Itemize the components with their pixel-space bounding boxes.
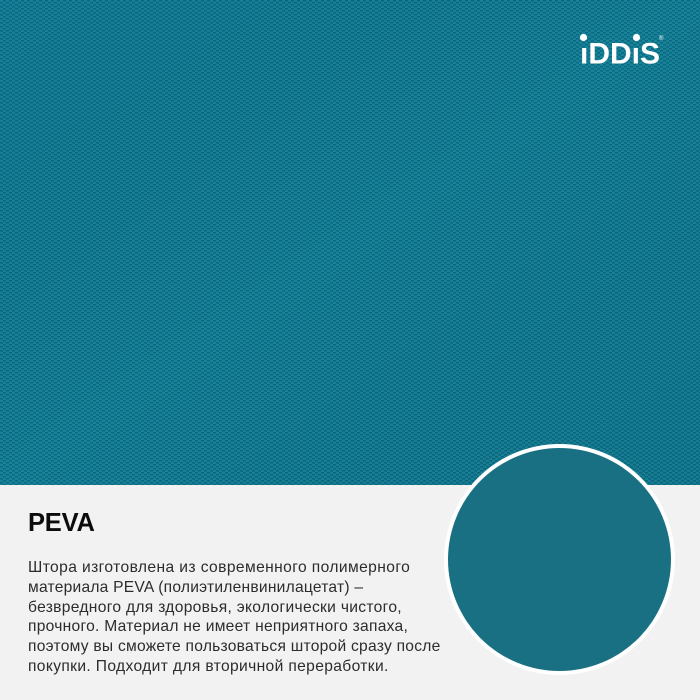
description text: поэтому вы сможете пользоваться шторой сразу после bbox=[28, 638, 441, 655]
title: PEVA bbox=[28, 509, 95, 537]
description text: безвредного для здоровья, экологически чистого, bbox=[28, 599, 402, 616]
description text: Штора изготовлена из современного полимерного bbox=[28, 559, 410, 576]
description text: прочного. Материал не имеет неприятного запаха, bbox=[28, 618, 408, 635]
description text: покупки. Подходит для вторичной переработки. bbox=[28, 658, 389, 675]
bottom text panel bbox=[0, 485, 700, 700]
circular material swatch bbox=[444, 444, 675, 675]
logo: IDDIS: ® bbox=[659, 35, 664, 42]
description text bbox=[28, 559, 441, 675]
logo: IDDIS: ıDDıS bbox=[580, 38, 660, 70]
fabric background bbox=[0, 0, 700, 485]
description text: материала PEVA (полиэтиленвинилацетат) – bbox=[28, 579, 363, 596]
